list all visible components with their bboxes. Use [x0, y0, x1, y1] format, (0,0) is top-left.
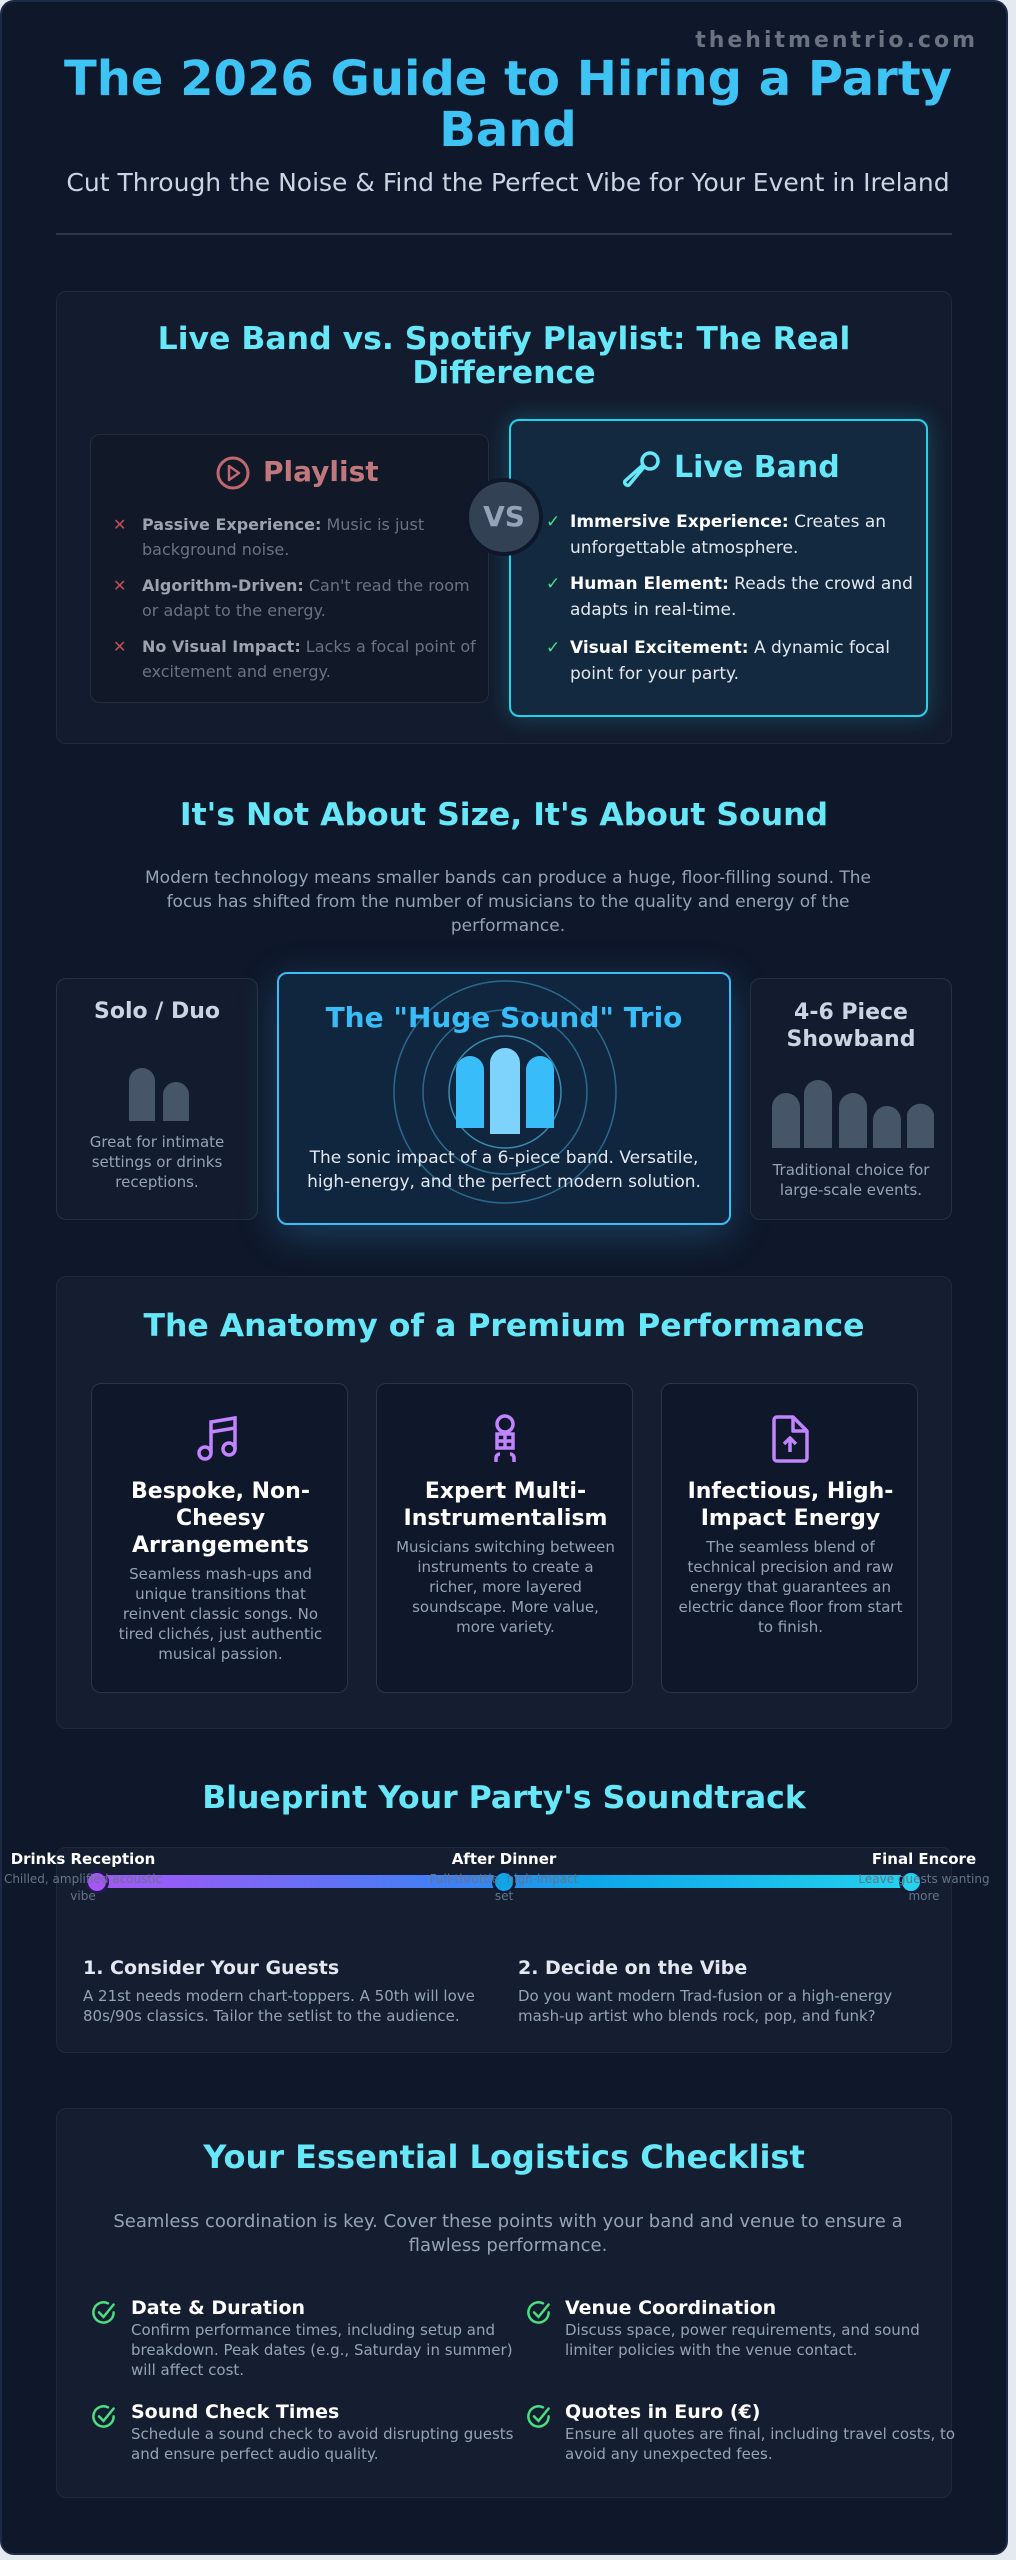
step: decide vibe — [518, 1957, 892, 2025]
list: live band pros: Visual Excitement: A dynamic focal point for your party. — [570, 638, 890, 684]
card: energy — [661, 1383, 918, 1693]
heading: live band vs playlist — [158, 321, 850, 391]
card: live band — [509, 419, 928, 717]
list: playlist cons: Algorithm-Driven: Can't read the room or adapt to the energy. — [142, 576, 470, 620]
icon: microphone — [622, 451, 660, 488]
badge: VS: VS — [483, 500, 525, 533]
heading: energy: Infectious, High-Impact Energy — [688, 1479, 893, 1531]
label: final encore: Final Encore — [872, 1850, 976, 1868]
card: multi-instrumentalism — [376, 1383, 633, 1693]
label: drinks reception — [4, 1850, 162, 1903]
card: showband — [750, 978, 952, 1220]
timeline point: after dinner — [492, 1870, 516, 1894]
list: playlist cons — [113, 515, 476, 681]
paragraph: size intro: Modern technology means smaller bands can produce a huge, floor-filling sound. The focus has shifted from the number of musicians to the quality and energy of the performance. — [145, 868, 871, 936]
list: playlist cons: ✕ — [113, 637, 126, 656]
step: decide vibe: Do you want modern Trad-fusion or a high-energy mash-up artist who blends rock, pop, and funk? — [518, 1987, 892, 2025]
heading: anatomy: The Anatomy of a Premium Performance — [143, 1308, 865, 1344]
checklist item: date: Confirm performance times, including setup and breakdown. Peak dates (e.g., Saturday in summer) will affect cost. — [131, 2321, 513, 2379]
list: playlist cons: ✕ — [113, 576, 126, 595]
title — [64, 51, 952, 158]
icon: file upload — [772, 1415, 809, 1463]
checklist item: date — [92, 2297, 513, 2379]
icon: musician — [494, 1414, 516, 1462]
heading: multi: Expert Multi-Instrumentalism — [404, 1479, 607, 1531]
checklist item: venue: Venue Coordination — [565, 2297, 776, 2319]
list: playlist cons: ✕ — [113, 515, 126, 534]
panel: live band vs playlist — [56, 291, 952, 744]
subtitle: Cut Through the Noise & Find the Perfect Vibe for Your Event in Ireland — [66, 168, 950, 197]
checklist item: date: Date & Duration — [131, 2297, 305, 2319]
checklist item: venue — [527, 2297, 920, 2359]
icon: sound waves and trio — [393, 980, 617, 1204]
chart: timeline bar — [85, 1870, 922, 1894]
timeline point: drinks — [85, 1870, 109, 1894]
heading: trio: The "Huge Sound" Trio — [326, 1001, 682, 1034]
icon: music note — [197, 1416, 237, 1461]
label: after dinner: Full-throttle, high-impact — [430, 1872, 578, 1886]
heading: live band vs playlist: Live Band vs. Spotify Playlist: The Real — [158, 321, 850, 357]
card: solo/duo — [56, 978, 258, 1220]
heading: solo duo: Solo / Duo — [94, 999, 220, 1024]
heading: bespoke: Bespoke, Non-Cheesy Arrangements — [131, 1479, 310, 1558]
text: bespoke: Seamless mash-ups and unique transitions that reinvent classic songs. No tired clichés, just authentic musical passion. — [119, 1565, 322, 1663]
heading: live band: Live Band — [674, 450, 840, 485]
text: multi: Musicians switching between instruments to create a richer, more layered soundscape. More value, more variety. — [396, 1538, 615, 1636]
list: live band pros: Human Element: Reads the crowd and adapts in real-time. — [570, 574, 913, 620]
label: drinks reception: Chilled, amplified acoustic — [4, 1872, 162, 1886]
label: final encore: Leave guests wanting — [858, 1872, 990, 1886]
checklist item: sound check: Schedule a sound check to avoid disrupting guests and ensure perfect audio quality. — [131, 2425, 513, 2463]
heading: live band vs playlist: Difference — [412, 355, 596, 391]
panel: timeline — [56, 1847, 952, 2053]
icon: five figures — [772, 1080, 934, 1148]
step: consider guests: A 21st needs modern chart-toppers. A 50th will love 80s/90s classics. Tailor the setlist to the audience. — [83, 1987, 475, 2025]
list: live band pros — [546, 512, 913, 684]
paragraph: logistics intro: Seamless coordination is key. Cover these points with your band and venue to ensure a flawless performance. — [113, 2211, 903, 2256]
badge: VS — [465, 478, 543, 556]
checklist item: sound check — [92, 2401, 513, 2463]
list: live band pros: ✓ — [546, 512, 560, 532]
card: bespoke — [91, 1383, 348, 1693]
panel: logistics — [56, 2108, 952, 2498]
step: consider guests: 1. Consider Your Guests — [83, 1957, 339, 1979]
title: The 2026 Guide to Hiring a Party — [64, 51, 952, 107]
panel: anatomy — [56, 1276, 952, 1729]
icon: two figures — [129, 1068, 189, 1121]
checklist item: sound check: Sound Check Times — [131, 2401, 339, 2423]
website label: thehitmentrio.com — [695, 28, 978, 53]
label: drinks reception: vibe — [70, 1889, 96, 1903]
timeline point: encore — [899, 1870, 923, 1894]
list: live band pros: ✓ — [546, 638, 560, 658]
heading: showband: 4-6 Piece Showband — [787, 1000, 915, 1052]
label: after dinner: After Dinner — [452, 1850, 556, 1868]
title: Band — [439, 102, 577, 158]
text: solo desc: Great for intimate settings or drinks receptions. — [90, 1133, 224, 1191]
label: final encore — [858, 1850, 990, 1903]
heading: size vs sound: It's Not About Size, It's About Sound — [180, 797, 828, 833]
label: after dinner: set — [495, 1889, 513, 1903]
checklist item: quotes: Quotes in Euro (€) — [565, 2401, 760, 2423]
card: playlist — [90, 434, 489, 703]
list: live band pros: ✓ — [546, 574, 560, 594]
label: final encore: more — [908, 1889, 940, 1903]
icon: play — [216, 456, 250, 490]
step: decide vibe: 2. Decide on the Vibe — [518, 1957, 747, 1979]
list: playlist cons: No Visual Impact: Lacks a focal point of excitement and energy. — [142, 637, 476, 681]
text: energy: The seamless blend of technical precision and raw energy that guarantees an electric dance floor from start to finish. — [679, 1538, 902, 1636]
list: playlist cons: Passive Experience: Music is just background noise. — [142, 515, 424, 559]
text: showband desc: Traditional choice for large-scale events. — [773, 1161, 929, 1199]
checklist item: venue: Discuss space, power requirements, and sound limiter policies with the venue contact. — [565, 2321, 920, 2359]
checklist item: quotes — [527, 2401, 955, 2463]
checklist item: quotes: Ensure all quotes are final, including travel costs, to avoid any unexpected fees. — [565, 2425, 955, 2463]
label: drinks reception: Drinks Reception — [11, 1850, 155, 1868]
step: consider guests — [83, 1957, 475, 2025]
label: after dinner — [430, 1850, 578, 1903]
list: live band pros: Immersive Experience: Creates an unforgettable atmosphere. — [570, 512, 886, 558]
heading: logistics: Your Essential Logistics Checklist — [203, 2138, 805, 2176]
card: trio — [277, 972, 731, 1225]
heading: playlist: Playlist — [263, 455, 379, 488]
heading: blueprint: Blueprint Your Party's Soundtrack — [202, 1780, 806, 1816]
text: trio desc: The sonic impact of a 6-piece band. Versatile, high-energy, and the perfect modern solution. — [307, 1148, 701, 1192]
